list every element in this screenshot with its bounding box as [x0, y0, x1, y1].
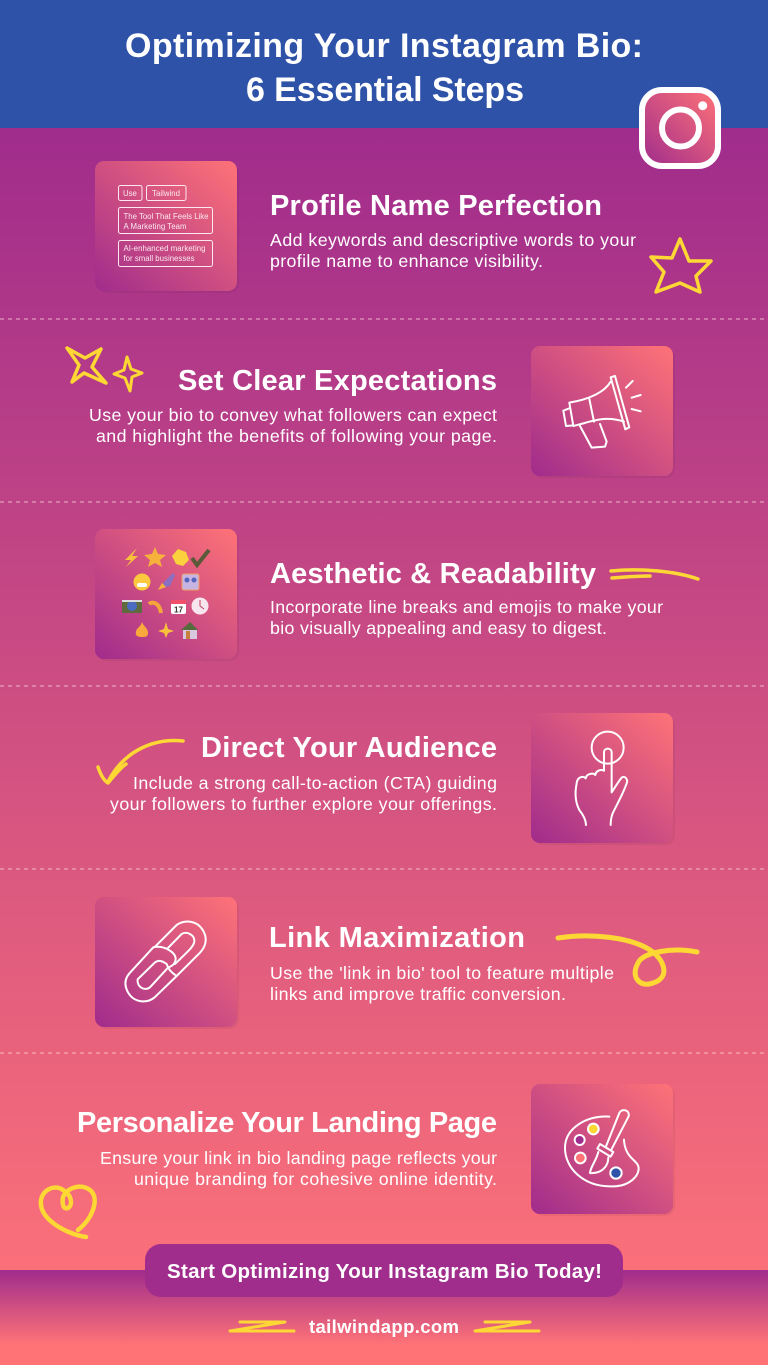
section dividers	[0, 319, 768, 1053]
description: Ensure your link in bio landing page reflects your	[100, 1148, 497, 1168]
tile: bio example	[95, 161, 239, 293]
tile: pointing hand	[531, 713, 675, 845]
tile: megaphone	[531, 346, 675, 478]
heading: Link Maximization	[269, 922, 525, 954]
panel: profile name perfection	[95, 161, 711, 293]
description: Include a strong call-to-action (CTA) guiding	[133, 773, 497, 793]
tile: bio example: AI-enhanced marketing	[124, 244, 206, 253]
description: links and improve traffic conversion.	[270, 984, 566, 1004]
call to action button: Start Optimizing Your Instagram Bio Today!	[167, 1260, 602, 1283]
description	[100, 1148, 497, 1189]
emoji: check with pencil	[192, 550, 209, 565]
icon: yellow heart	[41, 1187, 95, 1237]
emoji: calendar	[171, 600, 186, 614]
title: 6 Essential Steps	[246, 71, 524, 109]
emoji: star	[144, 547, 166, 567]
heading: Aesthetic & Readability	[270, 558, 596, 590]
heading: Profile Name Perfection	[270, 190, 602, 222]
call to action button	[145, 1244, 623, 1297]
tile: bio example: The Tool That Feels Like	[124, 212, 208, 221]
title	[125, 27, 643, 109]
emoji: camera	[122, 600, 142, 613]
description	[270, 963, 614, 1004]
emoji: rocket	[158, 573, 175, 590]
description: unique branding for cohesive online identity.	[134, 1169, 497, 1189]
tile: bio example: Use	[123, 189, 137, 198]
emoji: waving hand	[172, 549, 189, 566]
icon: yellow star	[651, 239, 711, 292]
icon: instagram logo	[642, 90, 718, 166]
emoji: robot	[182, 574, 199, 590]
emoji: house	[181, 622, 198, 639]
description: bio visually appealing and easy to digest.	[270, 618, 607, 638]
tile: paint palette	[531, 1084, 675, 1216]
description: your followers to further explore your offerings.	[110, 794, 497, 814]
title: Optimizing Your Instagram Bio:	[125, 27, 643, 65]
description: Incorporate line breaks and emojis to make your	[270, 597, 663, 617]
tile: bio example: Tailwind	[152, 189, 180, 198]
description	[270, 597, 663, 638]
header band	[0, 0, 768, 128]
panel: direct your audience	[98, 713, 675, 845]
tile: emoji collection	[95, 529, 239, 661]
emoji: clock	[192, 598, 208, 614]
tile: chain link	[95, 897, 239, 1029]
icon: yellow arrow	[98, 741, 183, 783]
panel: set clear expectations	[67, 346, 675, 478]
emoji: bolt	[125, 548, 138, 567]
description	[110, 773, 497, 814]
icon: yellow loop	[558, 936, 697, 984]
description	[89, 405, 497, 446]
icon: left scribble	[230, 1322, 294, 1331]
icon: yellow swoosh	[611, 570, 698, 579]
tile: bio example: A Marketing Team	[124, 222, 186, 231]
icon: sparkles	[67, 348, 142, 391]
footer band	[0, 1244, 768, 1365]
description: profile name to enhance visibility.	[270, 251, 543, 271]
emoji: grin	[134, 574, 150, 590]
emoji: fire	[136, 622, 148, 637]
panel: link maximization	[95, 897, 697, 1029]
description: Use the 'link in bio' tool to feature multiple	[270, 963, 614, 983]
panel: personalize landing page	[41, 1084, 675, 1237]
description	[270, 230, 636, 271]
description: Add keywords and descriptive words to your	[270, 230, 636, 250]
tile: bio example: for small businesses	[124, 254, 195, 263]
heading: Personalize Your Landing Page	[77, 1107, 497, 1139]
icon: right scribble	[475, 1322, 539, 1331]
description: and highlight the benefits of following your page.	[96, 426, 497, 446]
heading: Set Clear Expectations	[178, 365, 497, 397]
emoji: calendar: 17	[174, 606, 183, 614]
website link: tailwindapp.com	[309, 1316, 459, 1337]
heading: Direct Your Audience	[201, 732, 497, 764]
description: Use your bio to convey what followers can expect	[89, 405, 497, 425]
emoji: sparkles	[158, 622, 174, 638]
panel: aesthetic and readability	[95, 529, 698, 661]
emoji: rainbow	[149, 603, 161, 613]
